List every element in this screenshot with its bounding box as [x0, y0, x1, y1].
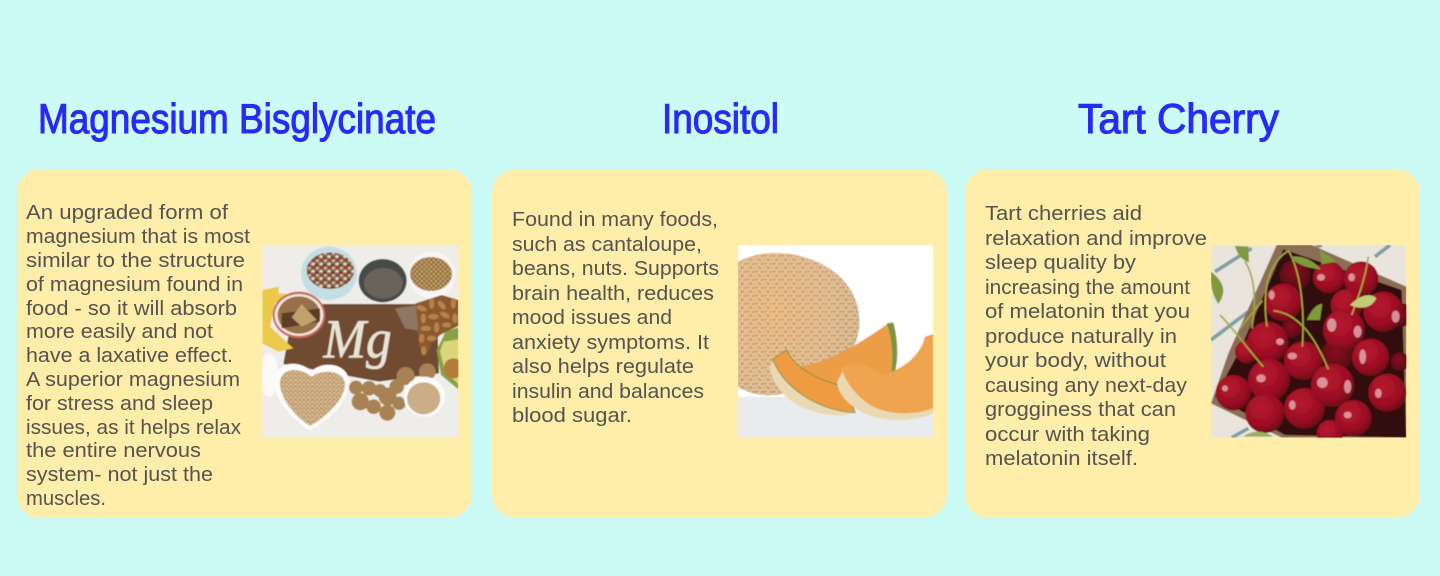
text block: tart cherry description: sleep quality by	[985, 251, 1137, 274]
text block: tart cherry description: grogginess that can	[985, 398, 1176, 421]
text block: inositol description: such as cantaloupe,	[512, 233, 702, 256]
avocado	[437, 327, 458, 389]
text block: magnesium description: magnesium that is most	[26, 225, 250, 248]
text block: tart cherry description: increasing the amount	[985, 276, 1190, 299]
left slice rind	[769, 360, 855, 415]
text block: inositol description	[512, 208, 719, 427]
text block: inositol description: mood issues and	[512, 306, 672, 329]
blue bowl	[301, 247, 357, 300]
text block: tart cherry description: your body, without	[985, 349, 1166, 372]
text block: magnesium description: similar to the structure	[26, 249, 245, 272]
text block: inositol description: beans, nuts. Supports	[512, 257, 719, 280]
right slice rind	[837, 368, 933, 420]
panel: Inositol	[492, 169, 947, 518]
illustration: tart cherries	[1211, 245, 1413, 447]
illustration: cantaloupe	[738, 245, 933, 438]
text block: tart cherry description: causing any next-day	[985, 374, 1188, 397]
illustration: magnesium-rich foods	[260, 245, 464, 438]
heading: Tart Cherry: Tart Cherry	[1078, 95, 1279, 142]
panel: Tart Cherry	[965, 169, 1420, 518]
text block: magnesium description: the entire nervous	[26, 439, 201, 462]
white bowl	[408, 252, 455, 298]
text block: tart cherry description: Tart cherries aid	[985, 202, 1142, 225]
Mg letters: Mg	[322, 308, 392, 369]
stems	[1220, 251, 1368, 369]
back slice	[800, 324, 894, 385]
left slice flesh	[773, 350, 855, 413]
bananas	[262, 287, 293, 352]
text block: magnesium description: food - so it will absorb	[26, 297, 237, 320]
text block: magnesium description: muscles.	[26, 487, 106, 510]
text block: magnesium description: more easily and not	[26, 320, 213, 343]
towel stripes	[1211, 245, 1390, 438]
text block: tart cherry description: of melatonin that you	[985, 300, 1190, 323]
text block: magnesium description: system- not just the	[26, 463, 213, 486]
wooden board	[283, 304, 439, 382]
heart bowl	[274, 364, 349, 431]
text block: magnesium description: have a laxative effect.	[26, 344, 233, 367]
almonds	[414, 297, 416, 299]
cherries	[1280, 260, 1413, 371]
text block: tart cherry description	[985, 202, 1207, 470]
table shadow	[738, 397, 933, 438]
dark bowl	[359, 259, 407, 302]
text block: inositol description: also helps regulate	[512, 355, 694, 378]
text block: magnesium description: of magnesium found in	[26, 273, 243, 296]
text block: inositol description: anxiety symptoms. It	[512, 331, 709, 354]
whole melon	[738, 253, 860, 395]
leaves	[1211, 246, 1376, 437]
text block: tart cherry description: produce naturally in	[985, 325, 1177, 348]
highlights	[1222, 273, 1400, 418]
text block: magnesium description: An upgraded form of	[26, 201, 228, 224]
text block: inositol description: Found in many foods,	[512, 208, 718, 231]
text block: inositol description: insulin and balances	[512, 380, 704, 403]
text block: inositol description: brain health, reduces	[512, 282, 714, 305]
text block: inositol description: blood sugar.	[512, 404, 632, 427]
text block: tart cherry description: relaxation and improve	[985, 227, 1207, 250]
right slice flesh	[842, 334, 933, 413]
text block: magnesium description: for stress and sleep	[26, 392, 213, 415]
punnet	[1211, 245, 1406, 438]
sesame dish	[404, 377, 445, 417]
heading: Inositol: Inositol	[662, 95, 779, 142]
text block: tart cherry description: melatonin itself.	[985, 447, 1138, 470]
cocoa dish	[273, 292, 325, 338]
walnuts	[349, 363, 436, 421]
panel: Magnesium Bisglycinate	[17, 169, 472, 518]
text block: magnesium description: A superior magnesium	[26, 368, 240, 391]
text block: tart cherry description: occur with taking	[985, 423, 1150, 446]
heading: Magnesium Bisglycinate: Magnesium Bisglycinate	[38, 95, 436, 142]
text block: magnesium description	[26, 201, 250, 510]
small white dish	[262, 354, 278, 396]
text block: magnesium description: issues, as it helps relax	[26, 416, 242, 439]
